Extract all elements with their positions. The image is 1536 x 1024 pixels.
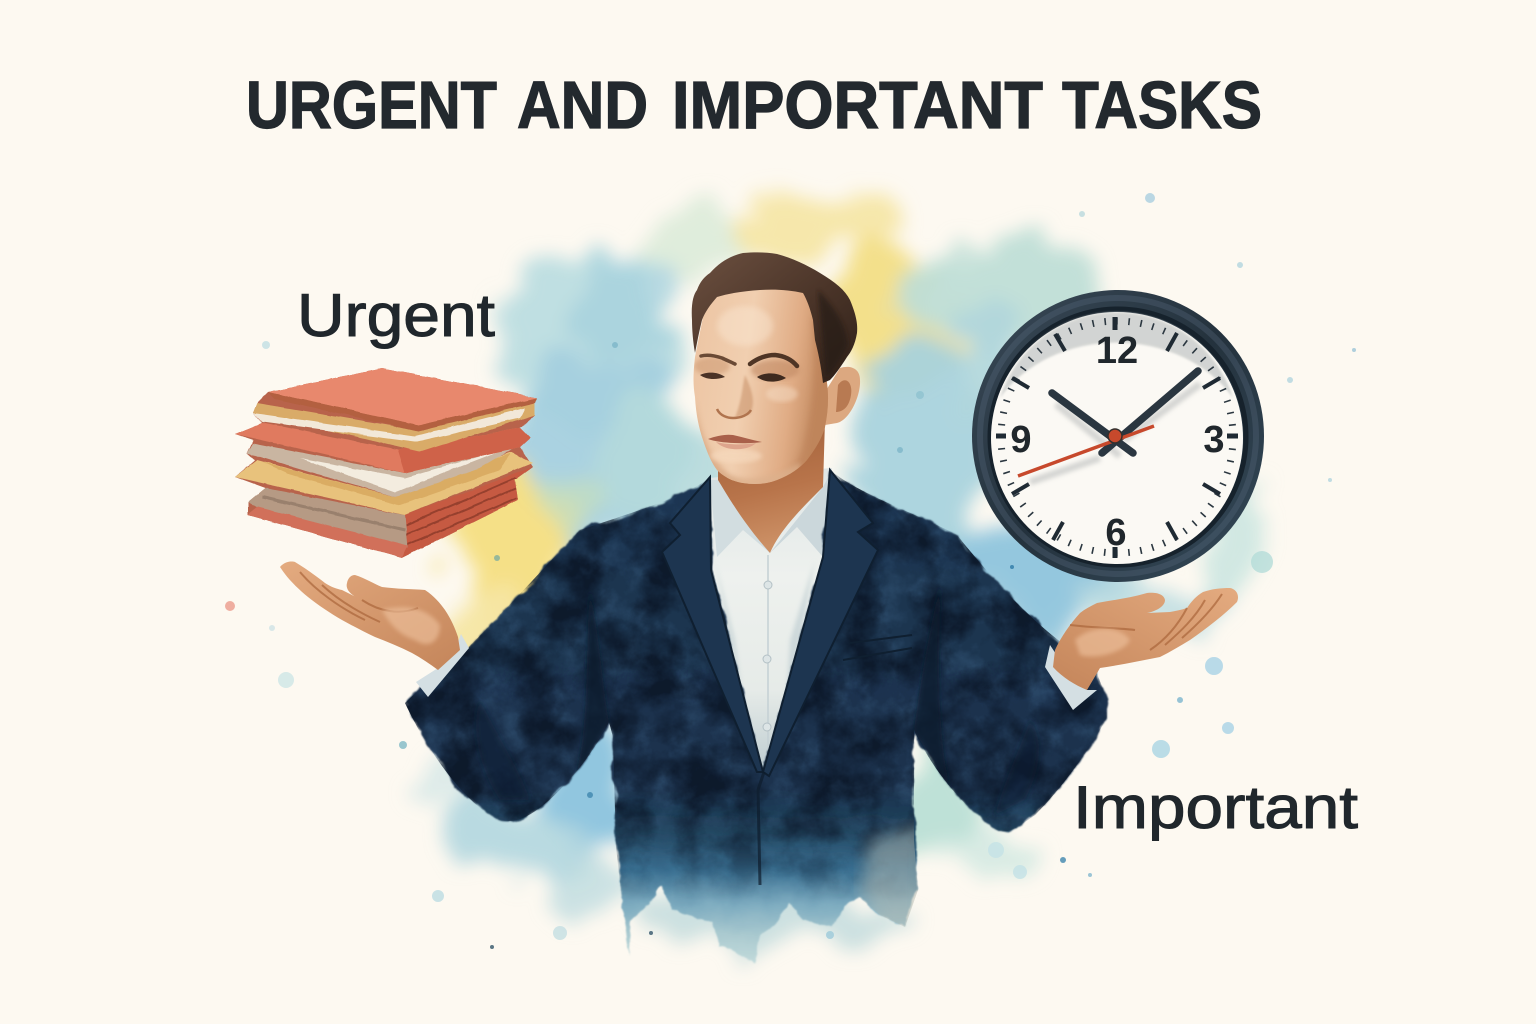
right lapel [763, 470, 878, 776]
title: IMPORTANT [672, 68, 1043, 143]
right cuff [1045, 645, 1097, 710]
shirt collar [710, 480, 770, 557]
clock face [991, 312, 1243, 564]
clock numerals: 9 [1010, 419, 1032, 461]
icon: wall clock [972, 290, 1264, 582]
face [694, 285, 828, 484]
left hand [280, 562, 460, 670]
title [246, 68, 1262, 143]
eyes [700, 373, 725, 379]
person [280, 252, 1238, 963]
label: Urgent: Urgent [297, 282, 495, 349]
label: Important: Important [1073, 774, 1358, 841]
title: URGENT [246, 68, 497, 143]
mouth [708, 435, 762, 443]
head [692, 252, 860, 500]
front seam [758, 772, 764, 885]
suit jacket [380, 460, 1140, 963]
folder stack silhouette [235, 368, 537, 558]
neck [718, 420, 825, 553]
left cuff [416, 634, 469, 697]
minute ticks [1000, 320, 1234, 554]
shirt [708, 468, 832, 776]
title: TASKS [1062, 68, 1262, 143]
clock numerals: 12 [1096, 330, 1138, 372]
nose [717, 409, 751, 418]
jacket texture [405, 473, 1107, 927]
title: AND [517, 68, 648, 143]
chest pocket [843, 635, 912, 660]
hour ticks [996, 317, 1238, 558]
eyebrows [701, 355, 735, 364]
right hand [1053, 588, 1238, 690]
clock numerals: 6 [1105, 512, 1127, 554]
ear [825, 367, 860, 425]
hour hand [1052, 393, 1133, 453]
clock numerals: 3 [1203, 419, 1225, 461]
face shading [694, 306, 828, 484]
paint splatter dots [225, 193, 1356, 949]
second hand [1018, 426, 1154, 476]
clock frame [972, 290, 1264, 582]
clock numerals [1010, 330, 1225, 554]
minute hand [1102, 371, 1198, 453]
hand shadows [1030, 384, 1200, 482]
hair [692, 252, 857, 383]
icon: stack of folders [235, 368, 537, 558]
left lapel [662, 477, 763, 772]
shirt buttons [764, 581, 772, 589]
center cap [1108, 429, 1122, 443]
watercolor wash background [425, 190, 1268, 941]
